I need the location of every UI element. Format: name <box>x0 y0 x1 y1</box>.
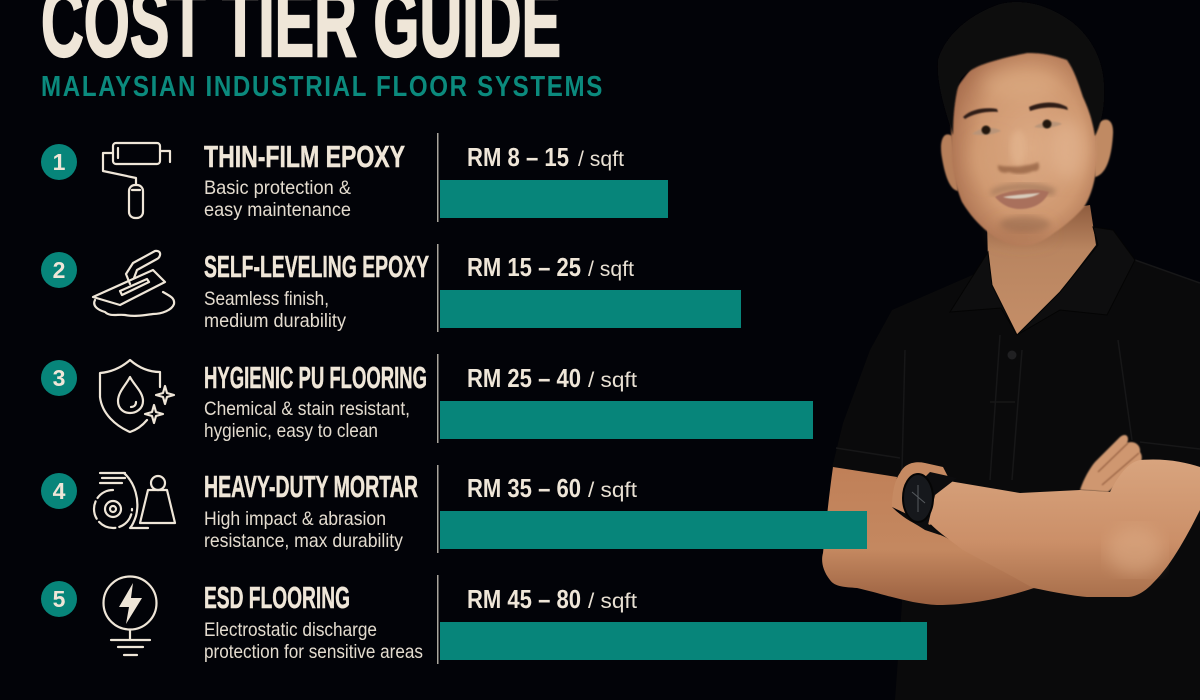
icon: grinder and weight <box>94 473 175 528</box>
price bar <box>437 133 668 222</box>
fingers <box>1080 435 1142 492</box>
price label: / sqft <box>588 369 637 392</box>
description <box>204 398 410 442</box>
description <box>204 177 351 221</box>
tier 1: thin-film epoxy <box>41 133 668 222</box>
number badge 4 <box>41 473 77 509</box>
description <box>204 288 346 332</box>
tier name: ESD FLOORING <box>204 580 350 615</box>
mouth <box>995 190 1049 209</box>
description: hygienic, easy to clean <box>204 420 378 442</box>
description <box>204 619 423 663</box>
price label: RM 25 – 40 <box>467 363 581 393</box>
number badge 3: 3 <box>53 365 65 391</box>
price bar <box>437 244 741 332</box>
tier name: THIN-FILM EPOXY <box>204 139 405 174</box>
description: Basic protection & <box>204 177 351 199</box>
eyes <box>972 128 1001 135</box>
tier name: HYGIENIC PU FLOORING <box>204 360 427 395</box>
face shading <box>972 70 1086 242</box>
price label: RM 45 – 80 <box>467 584 581 614</box>
number badge 3 <box>41 360 77 396</box>
description: High impact & abrasion <box>204 508 386 530</box>
placket and buttons <box>990 335 1022 480</box>
price label: RM 35 – 60 <box>467 473 581 503</box>
stubble <box>990 183 1056 196</box>
price label: RM 15 – 25 <box>467 252 581 282</box>
icon: paint roller <box>103 143 170 218</box>
arm on viewer's left <box>822 467 1034 605</box>
person portrait <box>822 2 1200 700</box>
number badge 1 <box>41 144 77 180</box>
tier 2: self-leveling epoxy <box>41 244 741 332</box>
face <box>951 50 1097 246</box>
eyebrows <box>963 108 998 119</box>
description: protection for sensitive areas <box>204 641 423 663</box>
description: medium durability <box>204 310 346 332</box>
price label: RM 8 – 15 <box>467 142 569 172</box>
number badge 5 <box>41 581 77 617</box>
description: resistance, max durability <box>204 530 403 552</box>
description: Seamless finish, <box>204 288 329 310</box>
collar <box>950 252 1017 335</box>
price bar <box>437 465 867 553</box>
neck <box>987 205 1096 335</box>
subtitle: MALAYSIAN INDUSTRIAL FLOOR SYSTEMS <box>41 71 604 103</box>
description: Electrostatic discharge <box>204 619 377 641</box>
icon: trowel <box>93 251 174 316</box>
hair <box>938 2 1104 136</box>
price bar <box>437 575 927 664</box>
number badge 2 <box>41 252 77 288</box>
price label: / sqft <box>588 258 634 281</box>
number badge 2: 2 <box>53 257 65 283</box>
price label: / sqft <box>578 148 624 171</box>
number badge 1: 1 <box>53 149 66 175</box>
tier 4: heavy-duty mortar <box>41 465 867 553</box>
tier 5: esd flooring <box>41 575 927 664</box>
description <box>204 508 403 552</box>
tier name: HEAVY-DUTY MORTAR <box>204 469 418 504</box>
polo shirt <box>832 227 1200 700</box>
description: easy maintenance <box>204 199 351 221</box>
price label: / sqft <box>588 590 637 613</box>
icon: shield with drop <box>100 360 174 432</box>
ears <box>941 134 958 191</box>
price bar <box>437 354 813 443</box>
icon: lightning bolt with ground <box>104 576 156 655</box>
description: Chemical & stain resistant, <box>204 398 410 420</box>
number badge 5: 5 <box>53 586 66 612</box>
nose <box>998 162 1039 174</box>
number badge 4: 4 <box>53 478 66 504</box>
tucked fist <box>892 462 960 525</box>
tier name: SELF-LEVELING EPOXY <box>204 249 429 284</box>
forearm on viewer's right <box>927 459 1200 597</box>
price label: / sqft <box>588 479 637 502</box>
watch <box>903 472 957 535</box>
tier 3: hygienic pu flooring <box>41 354 813 443</box>
